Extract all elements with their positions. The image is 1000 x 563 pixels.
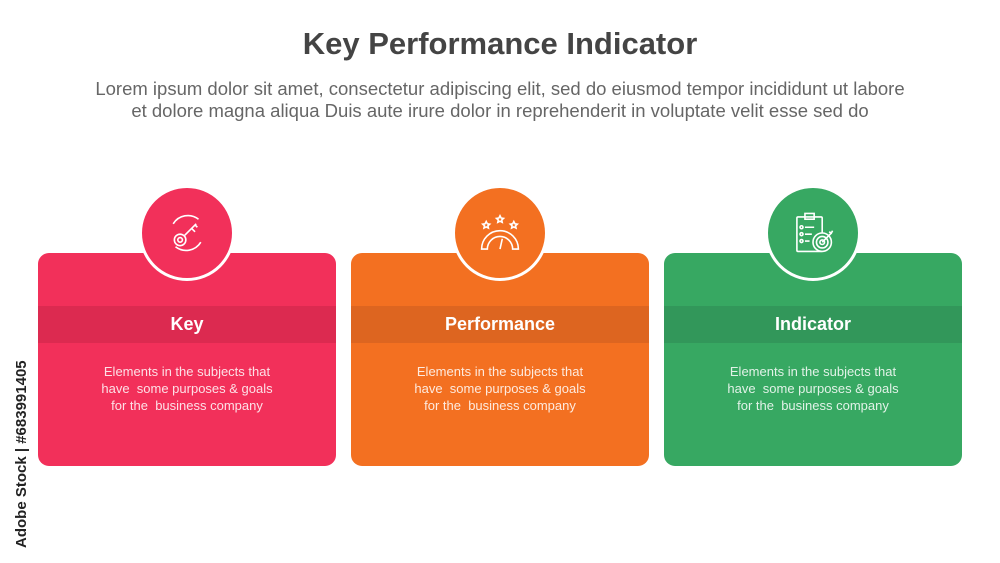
text: key	[101, 364, 273, 413]
band: key	[38, 306, 336, 343]
text: key: for the business company	[111, 398, 263, 413]
band: indicator	[664, 306, 962, 343]
text: indicator: for the business company	[737, 398, 889, 413]
icon circle: performance	[452, 185, 548, 281]
panel: key	[38, 253, 336, 466]
text: performance: have some purposes & goals	[414, 381, 586, 396]
panel: performance	[351, 253, 649, 466]
icon circle: key	[139, 185, 235, 281]
subtitle: et dolore magna aliqua Duis aute irure dolor in reprehenderit in voluptate velit esse sed do	[131, 100, 869, 121]
band: performance: Performance	[445, 314, 555, 334]
title: Key Performance Indicator	[303, 26, 697, 61]
subtitle	[95, 78, 905, 121]
icon circle: indicator	[765, 185, 861, 281]
panel: indicator	[664, 253, 962, 466]
subtitle: Lorem ipsum dolor sit amet, consectetur adipiscing elit, sed do eiusmod tempor incididunt ut labore	[95, 78, 905, 99]
text: indicator	[727, 364, 899, 413]
text: key: have some purposes & goals	[101, 381, 273, 396]
band: indicator: Indicator	[775, 314, 851, 334]
text: performance	[414, 364, 586, 413]
watermark id: Adobe Stock | #683991405	[13, 360, 30, 548]
band: key: Key	[170, 314, 204, 334]
text: performance: Elements in the subjects that	[417, 364, 583, 379]
text: indicator: have some purposes & goals	[727, 381, 899, 396]
text: key: Elements in the subjects that	[104, 364, 270, 379]
text: performance: for the business company	[424, 398, 576, 413]
band: performance	[351, 306, 649, 343]
text: indicator: Elements in the subjects that	[730, 364, 896, 379]
